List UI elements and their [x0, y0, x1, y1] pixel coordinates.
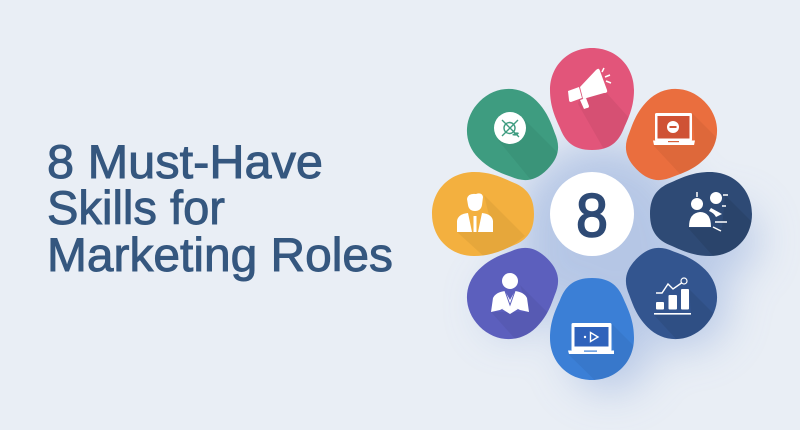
petal: pink megaphone [550, 48, 634, 150]
title: 8 Must-Have [47, 135, 323, 188]
petal: yellow businessman [432, 172, 534, 262]
center number: 8 [576, 182, 608, 250]
icon: video laptop [568, 323, 614, 354]
center circle [550, 172, 634, 256]
icon: laptop [653, 113, 695, 145]
petal: green shield [466, 88, 558, 180]
icon: bar chart [654, 278, 691, 315]
petal: orange laptop [626, 88, 718, 180]
icon: presenter [491, 273, 529, 314]
background glow [487, 142, 757, 390]
title: Marketing Roles [47, 228, 393, 281]
petal: navy audience [650, 172, 752, 256]
icon: shield badge [494, 112, 526, 144]
icon: megaphone [568, 68, 611, 109]
petal: blue video laptop [550, 278, 634, 380]
title [47, 135, 393, 281]
petal: dark blue chart [626, 248, 718, 340]
icon: businessman [457, 193, 493, 232]
petal: purple person [466, 248, 558, 340]
title: Skills for [47, 181, 225, 234]
icon: audience [689, 192, 728, 231]
